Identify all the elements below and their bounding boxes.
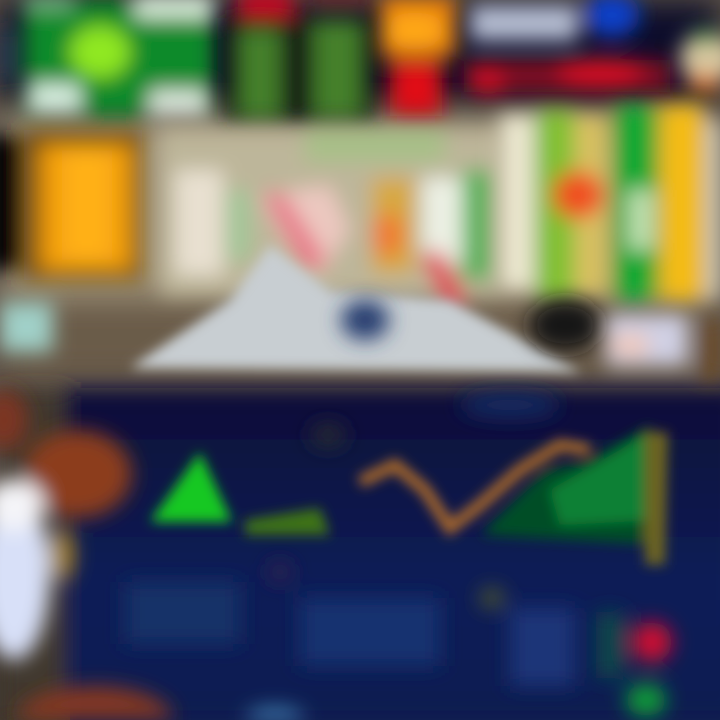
side swatches (0, 302, 720, 380)
grey-white mountain shape (130, 245, 582, 372)
top row: grey label, blue tab and red band (464, 0, 670, 95)
left black edge and orange panel (0, 130, 142, 280)
dashboard background (0, 388, 720, 720)
mountain spots (341, 299, 601, 351)
hand and finger (0, 390, 305, 720)
dark dashboard: area chart (150, 425, 668, 565)
right striped columns (500, 105, 720, 300)
middle candlestick panel (160, 128, 500, 312)
top right corner swatch (680, 30, 720, 92)
top row: green chart panel (0, 0, 214, 116)
dark dashboard: lower tiles (125, 392, 672, 716)
top row: dark green columns (225, 0, 375, 122)
top row: orange and red block (380, 0, 456, 116)
background colour bands (0, 0, 720, 380)
